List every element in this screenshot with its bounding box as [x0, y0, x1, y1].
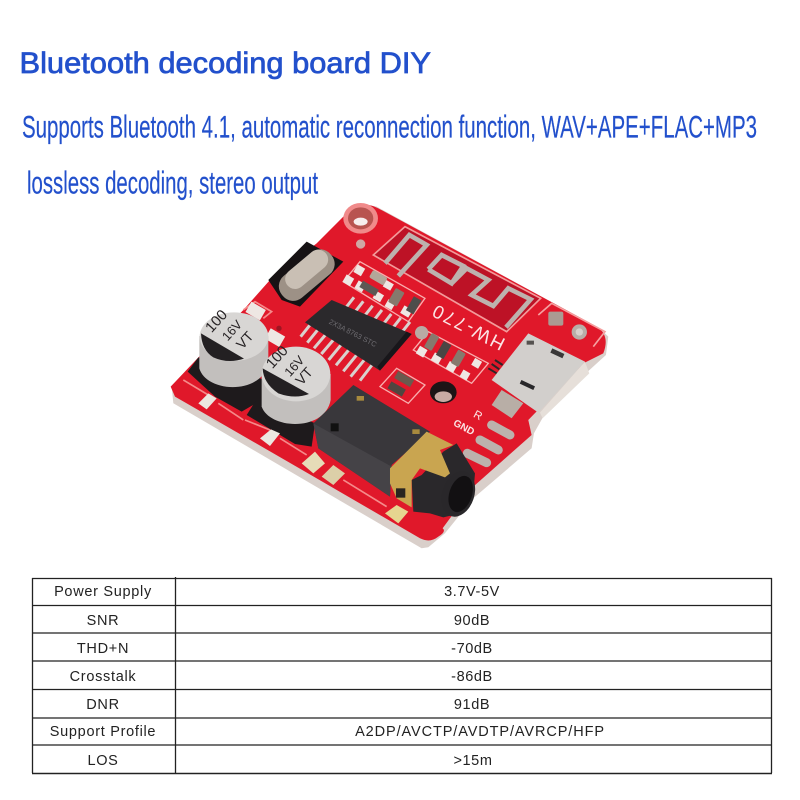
- capacitor right: VT: [292, 364, 316, 388]
- product photo: bluetooth decoder board: [171, 203, 608, 548]
- table labels: THD+N: [77, 641, 129, 657]
- table values: -70dB: [451, 641, 493, 657]
- table labels: Power Supply: [54, 584, 152, 600]
- table values: 3.7V-5V: [444, 584, 500, 600]
- jack barrel: [412, 443, 475, 517]
- HW-770 label: HW-770: [427, 300, 508, 355]
- table labels: [50, 584, 156, 769]
- table values: [355, 584, 605, 769]
- capacitor right: 16V: [282, 353, 308, 379]
- solder pads R GND L: [467, 425, 510, 463]
- capacitor feet: [188, 357, 265, 412]
- table values: >15m: [453, 753, 493, 769]
- antenna trace: [373, 227, 605, 355]
- mounting hole: [343, 203, 378, 234]
- table labels: DNR: [86, 697, 120, 713]
- table values: 91dB: [454, 697, 490, 713]
- table values: A2DP/AVCTP/AVDTP/AVRCP/HFP: [355, 724, 605, 740]
- spec table: [32, 577, 772, 774]
- table labels: Crosstalk: [70, 669, 136, 685]
- jack solder pads: [302, 452, 325, 473]
- IC chip: [301, 297, 412, 381]
- capacitors: [188, 307, 331, 447]
- capacitor right: 100: [263, 343, 292, 372]
- audio jack: [302, 385, 481, 523]
- table labels: LOS: [87, 753, 119, 769]
- passive components: [245, 262, 488, 403]
- capacitor left: 100: [203, 307, 231, 336]
- capacitor left: 16V: [219, 317, 245, 344]
- crystal: [268, 242, 343, 307]
- table values: -86dB: [451, 669, 493, 685]
- board edge: [172, 203, 608, 548]
- capacitor left: [199, 307, 268, 387]
- table labels: Support Profile: [50, 724, 156, 740]
- board top: [171, 205, 606, 540]
- pad silk labels: GND: [451, 418, 476, 438]
- power pads: [538, 303, 605, 347]
- jack body: [313, 385, 430, 497]
- title: Bluetooth decoding board DIY: [20, 47, 431, 80]
- subtitle line 2: lossless decoding, stereo output: [27, 164, 318, 200]
- IC chip: 2X3A 8763 STC: [327, 317, 379, 349]
- pad silk labels: R: [471, 409, 484, 423]
- table values: 90dB: [454, 613, 490, 629]
- silk lines: [183, 302, 387, 507]
- capacitor left: VT: [233, 328, 257, 352]
- table labels: SNR: [87, 613, 119, 629]
- pad silk labels: [451, 409, 484, 438]
- jack gold shield: [390, 432, 453, 507]
- capacitor right: [262, 343, 331, 424]
- via hole: [430, 381, 457, 403]
- micro USB connector: [488, 333, 589, 418]
